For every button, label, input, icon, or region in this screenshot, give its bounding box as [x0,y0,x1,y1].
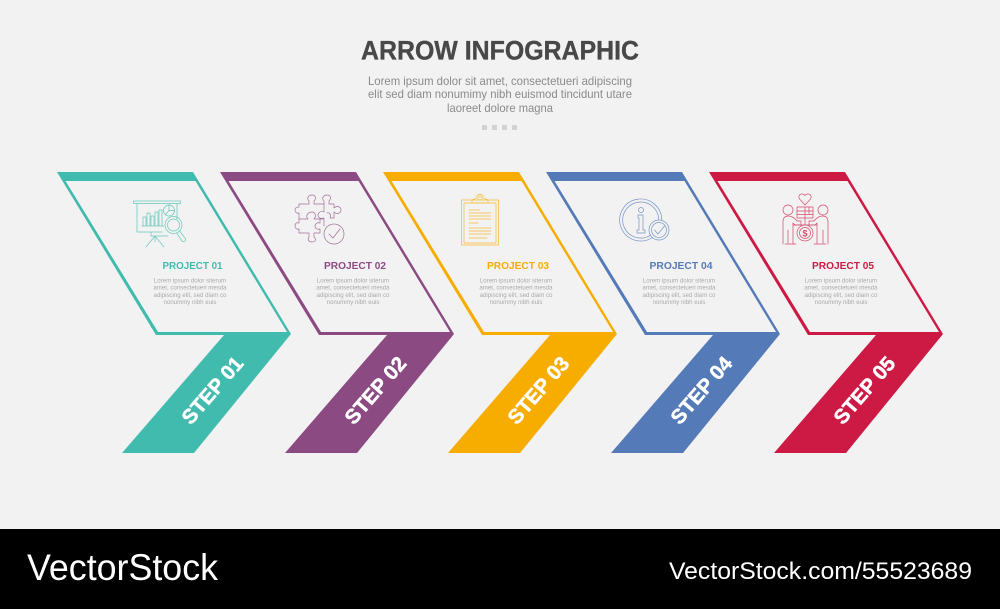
panel: step 01 arrow [57,172,291,453]
description 03: amet, consectetueri mesda [479,284,553,292]
description 04: Lorem ipsum dolor siterum [643,278,715,284]
description 05: amet, consectetueri mesda [804,284,878,292]
description 03: adipiscing elit, sed diam co [480,292,553,299]
arrow outline and top bar 05 [709,172,943,453]
description 02: nonummy nibh euis [327,299,379,306]
description 02: amet, consectetueri mesda [316,284,390,292]
project heading 05: PROJECT 05 [812,261,874,272]
description 02: Lorem ipsum dolor siterum [317,278,389,284]
icon: presentation board with magnifier [134,201,186,247]
subtitle text block [368,74,632,115]
title pagination dots [482,125,517,130]
description 04: nonummy nibh euis [653,299,705,306]
icon: puzzle with check badge [295,195,344,244]
description 05: adipiscing elit, sed diam co [805,292,878,299]
subtitle text block: elit sed diam nonumimy nibh euismod tincidunt utare [368,87,632,101]
icon: info circle with check badge [620,199,669,241]
description 04: amet, consectetueri mesda [642,284,716,292]
description 01: Lorem ipsum dolor siterum [154,278,226,284]
description 05: nonummy nibh euis [815,299,867,306]
step label 04: STEP 04 [666,352,738,429]
description 01: nonummy nibh euis [164,299,216,306]
icon: two people with heart and money: $ [802,228,808,238]
project heading 04: PROJECT 04 [650,261,713,272]
footer brand name: VectorStock [27,547,218,588]
description 01: adipiscing elit, sed diam co [154,292,227,299]
subtitle text block: Lorem ipsum dolor sit amet, consectetueri adipiscing [368,74,632,88]
description 04 [642,278,716,306]
description 05: Lorem ipsum dolor siterum [805,278,877,284]
icon: two people with heart and money [783,194,828,244]
description 01 [153,278,227,306]
watermark footer band [0,529,1000,609]
arrow outline and top bar 02 [220,172,454,453]
step label 01: STEP 01 [177,352,248,429]
project heading 01: PROJECT 01 [162,261,223,272]
project heading 02: PROJECT 02 [324,261,386,272]
footer image id: VectorStock.com/55523689 [669,558,972,585]
description 03: nonummy nibh euis [490,299,542,306]
step label 05: STEP 05 [829,352,900,429]
panel: step 05 arrow [709,172,943,453]
description 02 [316,278,390,306]
panel: step 02 arrow [220,172,454,453]
arrow outline and top bar 03 [383,172,617,453]
step label 03: STEP 03 [503,352,574,429]
arrow outline and top bar 04 [546,172,780,453]
description 05 [804,278,878,306]
panel: step 03 arrow [383,172,617,453]
description 03 [479,278,553,306]
icon: clipboard [462,194,498,245]
description 03: Lorem ipsum dolor siterum [480,278,552,284]
panel: step 04 arrow [546,172,780,453]
project heading 03: PROJECT 03 [487,261,549,272]
subtitle text block: laoreet dolore magna [447,101,553,115]
arrow outline and top bar 01 [57,172,291,453]
step label 02: STEP 02 [340,352,411,429]
description 02: adipiscing elit, sed diam co [317,292,390,299]
description 04: adipiscing elit, sed diam co [643,292,716,299]
title: ARROW INFOGRAPHIC [361,36,639,66]
description 01: amet, consectetueri mesda [153,284,227,292]
